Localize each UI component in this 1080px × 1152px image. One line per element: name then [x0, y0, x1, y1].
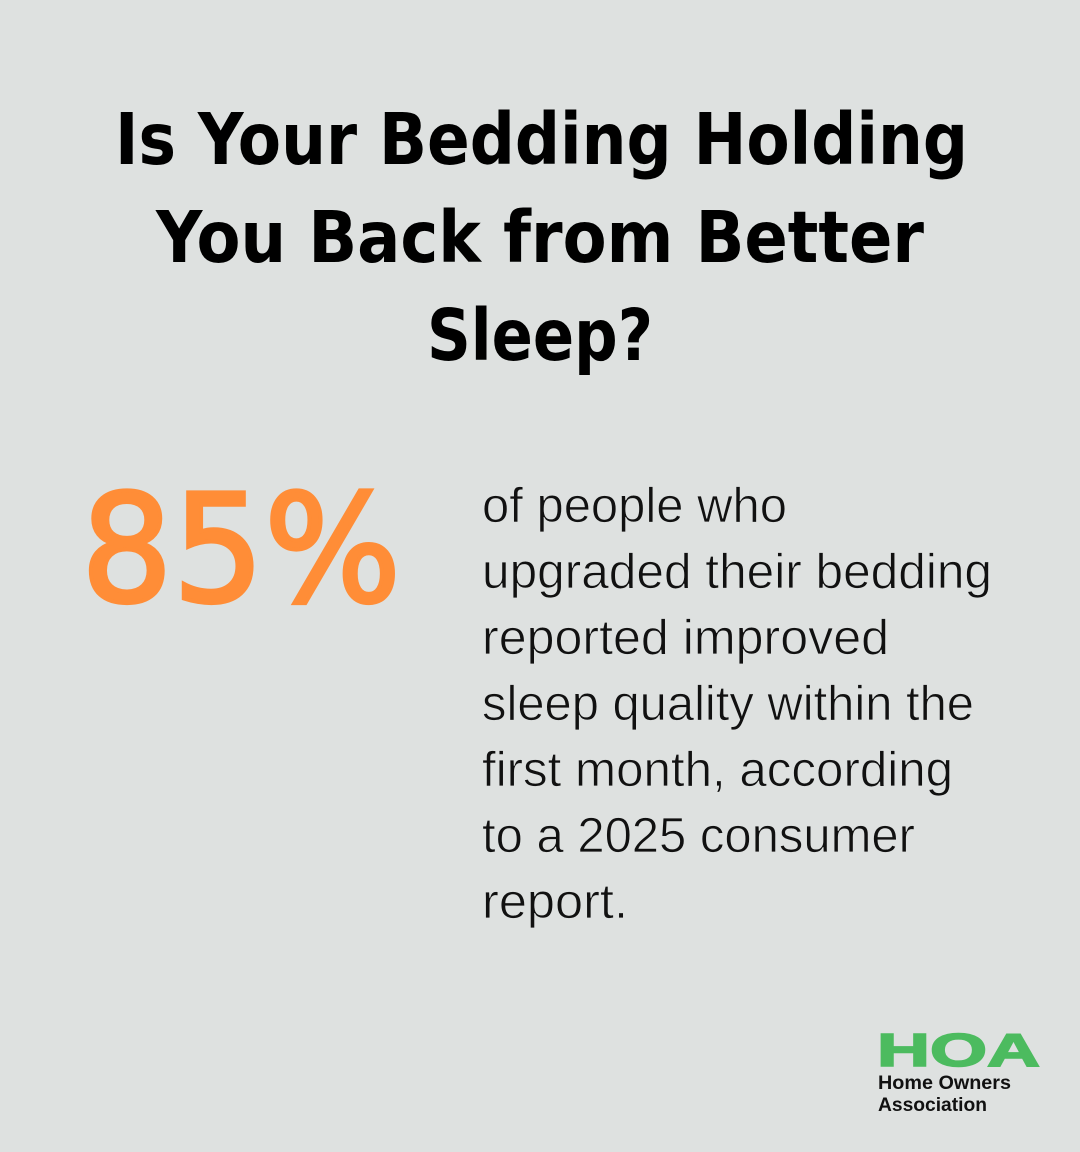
logo: HOA Home Owners Association: Home Owners: [878, 1073, 1011, 1094]
statistic description: [482, 479, 992, 929]
statistic description: of people who: [482, 479, 787, 533]
statistic description: first month, according: [482, 743, 953, 797]
logo: HOA Home Owners Association: Association: [878, 1095, 987, 1116]
title: Sleep?: [427, 294, 653, 377]
statistic description: report.: [482, 875, 628, 929]
logo: HOA Home Owners Association: [877, 1024, 1040, 1116]
statistic description: sleep quality within the: [482, 677, 974, 731]
title: Is Your Bedding Holding: [115, 98, 968, 181]
title: You Back from Better: [155, 196, 924, 279]
statistic description: upgraded their bedding: [482, 545, 992, 599]
statistic description: reported improved: [482, 611, 889, 665]
statistic description: to a 2025 consumer: [482, 809, 915, 863]
title: [115, 98, 968, 377]
logo: HOA Home Owners Association: HOA: [877, 1024, 1040, 1076]
big statistic: 85%: 85%: [81, 464, 401, 637]
